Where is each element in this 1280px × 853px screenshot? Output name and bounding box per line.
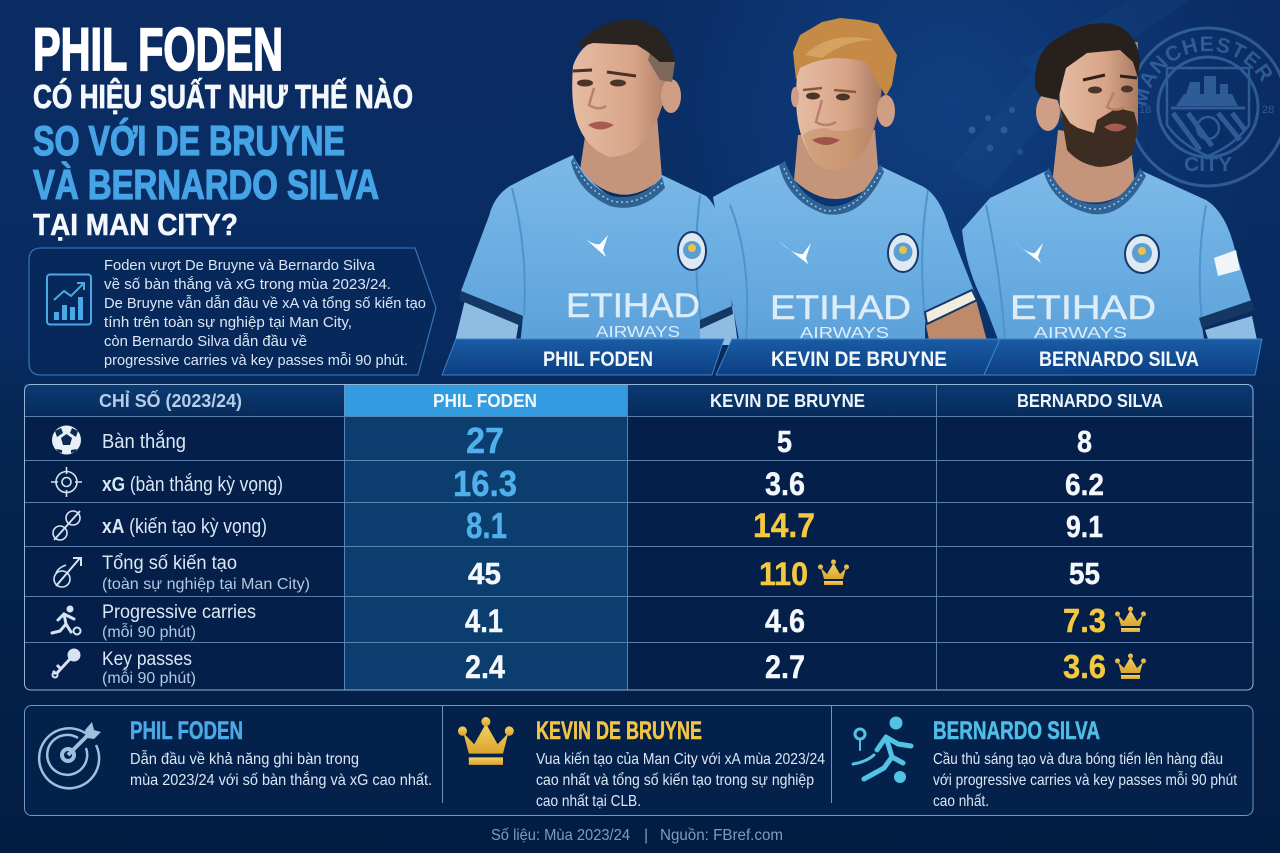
footer source: Số liệu: Mùa 2023/24 bbox=[491, 827, 630, 844]
summary: Phil Foden: PHIL FODEN bbox=[130, 717, 243, 745]
icon: target with arrow bbox=[39, 722, 101, 788]
values: Kevin De Bruyne: 5 bbox=[777, 424, 792, 459]
callout text: về số bàn thắng và xG trong mùa 2023/24. bbox=[104, 276, 391, 293]
table header labels: CHỈ SỐ (2023/24) bbox=[99, 390, 242, 411]
values: Phil Foden: 45 bbox=[468, 556, 501, 591]
icon: progressive carries bbox=[52, 606, 80, 634]
row labels: Progressive carries bbox=[102, 602, 256, 623]
callout text: tính trên toàn sự nghiệp tại Man City, bbox=[104, 314, 352, 331]
title: SO VỚI DE BRUYNE bbox=[33, 116, 345, 164]
player: Kevin De Bruyne: AIRWAYS bbox=[800, 325, 889, 342]
summary: Kevin De Bruyne: cao nhất và tổng số kiến tạo trong sự nghiệp bbox=[536, 771, 814, 789]
summary: Phil Foden: Dẫn đầu về khả năng ghi bàn trong bbox=[130, 749, 359, 768]
name plate: Bernardo Silva: BERNARDO SILVA bbox=[1039, 348, 1199, 371]
values: Bernardo Silva bbox=[1063, 424, 1106, 685]
values: Bernardo Silva: 6.2 bbox=[1065, 467, 1104, 502]
callout text: Foden vượt De Bruyne và Bernardo Silva bbox=[104, 257, 376, 274]
footer source: | bbox=[644, 827, 648, 844]
footer source: Nguồn: FBref.com bbox=[660, 827, 783, 844]
icon: crown 7.3 bbox=[1115, 606, 1146, 632]
name plates bbox=[442, 339, 1262, 375]
row labels: (mỗi 90 phút) bbox=[102, 668, 196, 687]
row labels: Bàn thắng bbox=[102, 430, 186, 453]
values: Phil Foden bbox=[453, 420, 517, 685]
name plate: Phil Foden: PHIL FODEN bbox=[543, 348, 653, 371]
crest watermark bbox=[1135, 26, 1280, 188]
shirt details bbox=[1014, 241, 1043, 263]
icon: key bbox=[52, 648, 80, 678]
column header: Phil Foden bbox=[344, 384, 627, 416]
summary: Bernardo Silva: với progressive carries và key passes mỗi 90 phút bbox=[933, 770, 1237, 789]
icon: total assists bbox=[54, 558, 81, 587]
player: Bernardo Silva bbox=[962, 23, 1258, 345]
name plate: Kevin De Bruyne bbox=[716, 339, 1000, 375]
icon: crown 3.6 bbox=[1115, 654, 1146, 679]
values: Bernardo Silva: 55 bbox=[1069, 556, 1100, 591]
values: Kevin De Bruyne bbox=[753, 424, 815, 685]
summary: Kevin De Bruyne: KEVIN DE BRUYNE bbox=[536, 717, 702, 745]
values: Phil Foden: 4.1 bbox=[465, 603, 503, 639]
icon: rising chart bbox=[47, 274, 91, 324]
callout text: còn Bernardo Silva dẫn đầu về bbox=[104, 333, 307, 350]
icon: xA link bbox=[53, 511, 80, 540]
title: CÓ HIỆU SUẤT NHƯ THẾ NÀO bbox=[33, 78, 413, 115]
icon: dribbling player bbox=[853, 716, 911, 783]
table header labels: KEVIN DE BRUYNE bbox=[710, 391, 865, 411]
footer source bbox=[491, 827, 783, 844]
name plate: Kevin De Bruyne: KEVIN DE BRUYNE bbox=[771, 348, 947, 371]
values: Bernardo Silva: 8 bbox=[1077, 424, 1092, 459]
callout text: De Bruyne vẫn dẫn đầu về xA và tổng số kiến tạo bbox=[104, 295, 426, 312]
crest watermark: 18 bbox=[1139, 104, 1151, 116]
summary: Bernardo Silva bbox=[853, 716, 1237, 810]
player: Phil Foden: ETIHAD bbox=[566, 287, 700, 325]
values: Kevin De Bruyne: 110 bbox=[759, 556, 808, 592]
summary: Bernardo Silva: BERNARDO SILVA bbox=[933, 717, 1100, 745]
values: Phil Foden: 8.1 bbox=[466, 505, 507, 546]
values: Phil Foden: 2.4 bbox=[465, 649, 505, 685]
player: Phil Foden bbox=[454, 19, 738, 345]
table header labels: BERNARDO SILVA bbox=[1017, 391, 1163, 411]
summary: Kevin De Bruyne: Vua kiến tạo của Man City với xA mùa 2023/24 bbox=[536, 751, 825, 768]
row labels: xA (kiến tạo kỳ vọng) bbox=[102, 516, 267, 538]
title bbox=[33, 16, 413, 242]
player: Bernardo Silva: ETIHAD bbox=[1010, 289, 1156, 327]
title: PHIL FODEN bbox=[33, 16, 283, 83]
row labels: Tổng số kiến tạo bbox=[102, 553, 237, 574]
summary: Kevin De Bruyne: cao nhất tại CLB. bbox=[536, 793, 641, 810]
crest watermark: CITY bbox=[1184, 154, 1233, 176]
player: Kevin De Bruyne: ETIHAD bbox=[770, 289, 911, 327]
table header labels: PHIL FODEN bbox=[433, 391, 537, 411]
bottom summary panel bbox=[24, 705, 1253, 816]
values: Phil Foden: 27 bbox=[466, 420, 504, 461]
callout: summary bbox=[29, 248, 436, 375]
player: Kevin De Bruyne bbox=[713, 18, 988, 345]
row labels bbox=[102, 430, 310, 687]
player: Bernardo Silva: AIRWAYS bbox=[1034, 325, 1127, 342]
summary: Kevin De Bruyne bbox=[458, 717, 825, 810]
title: VÀ BERNARDO SILVA bbox=[33, 161, 379, 208]
icon: gold crown bbox=[458, 717, 514, 765]
crest watermark: 28 bbox=[1262, 104, 1274, 116]
name plate: Phil Foden bbox=[442, 339, 724, 375]
summary: Bernardo Silva: Cầu thủ sáng tạo và đưa bóng tiến lên hàng đầu bbox=[933, 751, 1223, 768]
name plate: Bernardo Silva bbox=[984, 339, 1262, 375]
player photos bbox=[454, 18, 1258, 345]
table header labels bbox=[99, 390, 1163, 411]
callout text: progressive carries và key passes mỗi 90 phút. bbox=[104, 352, 408, 369]
values: Kevin De Bruyne: 2.7 bbox=[765, 649, 805, 685]
row labels: Key passes bbox=[102, 649, 192, 670]
player: Phil Foden: AIRWAYS bbox=[596, 324, 680, 341]
summary: Phil Foden: mùa 2023/24 với số bàn thắng và xG cao nhất. bbox=[130, 770, 432, 789]
summary: Bernardo Silva: cao nhất. bbox=[933, 793, 989, 810]
values: Bernardo Silva: 3.6 bbox=[1063, 648, 1106, 685]
row labels: (toàn sự nghiệp tại Man City) bbox=[102, 576, 310, 593]
icon: crown 110 bbox=[818, 560, 849, 585]
values: Kevin De Bruyne: 14.7 bbox=[753, 507, 815, 545]
icon: target xG bbox=[51, 467, 82, 497]
icon: soccer ball bbox=[52, 426, 81, 454]
crest watermark: MANCHESTER bbox=[1138, 36, 1272, 106]
row labels: (mỗi 90 phút) bbox=[102, 622, 196, 641]
summary: Phil Foden bbox=[39, 717, 432, 789]
values: Kevin De Bruyne: 4.6 bbox=[765, 603, 805, 639]
row labels: xG (bàn thắng kỳ vọng) bbox=[102, 473, 283, 496]
values: Phil Foden: 16.3 bbox=[453, 463, 517, 504]
shirt details bbox=[779, 241, 811, 264]
values: Bernardo Silva: 9.1 bbox=[1066, 509, 1103, 544]
comparison table bbox=[24, 384, 1253, 690]
values: Bernardo Silva: 7.3 bbox=[1063, 602, 1106, 639]
shirt details bbox=[579, 233, 608, 257]
title: TẠI MAN CITY? bbox=[33, 207, 238, 242]
callout text bbox=[104, 257, 426, 369]
values: Kevin De Bruyne: 3.6 bbox=[765, 466, 805, 502]
